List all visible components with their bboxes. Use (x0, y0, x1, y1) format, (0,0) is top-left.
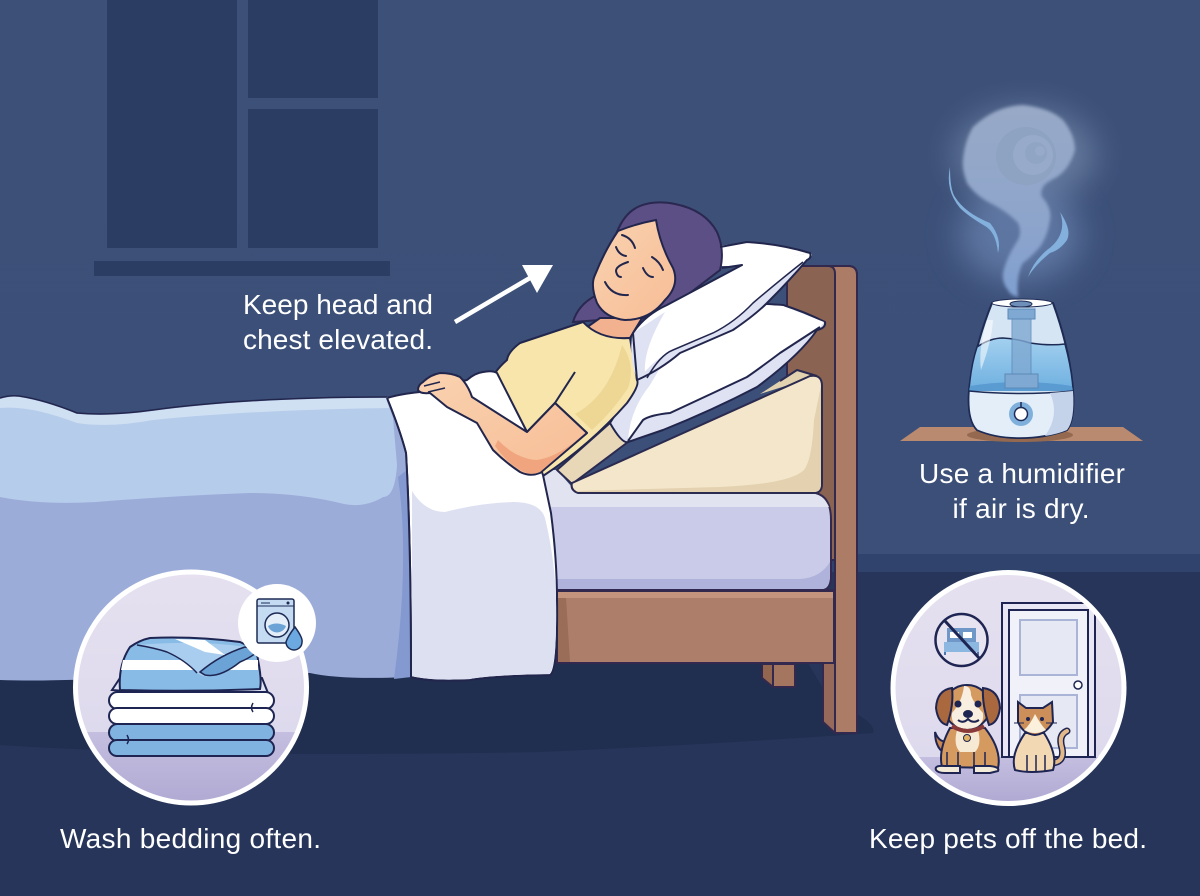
woman (387, 202, 722, 681)
facial features (605, 235, 663, 295)
door (1002, 603, 1095, 757)
water (969, 338, 1073, 390)
power dial (1009, 402, 1033, 426)
wedge pillow (557, 370, 822, 493)
shelf (900, 427, 1143, 441)
face (593, 220, 675, 320)
base (969, 391, 1073, 438)
neck (583, 318, 642, 338)
shirt (495, 322, 638, 476)
lower pillow (610, 300, 825, 442)
text: keep head and chest elevated (243, 289, 433, 355)
text: use a humidifier: Use a humidifier (919, 458, 1125, 489)
mattress (535, 470, 831, 590)
text: use a humidifier (919, 458, 1125, 524)
hair (573, 202, 722, 322)
circle: wash bedding (70, 565, 316, 812)
circle: keep pets off (890, 565, 1130, 807)
text: keep head and chest elevated: chest elevated. (243, 324, 433, 355)
upper pillow back (718, 242, 810, 266)
no bed sign (936, 614, 988, 666)
text: wash bedding often: Wash bedding often. (60, 823, 321, 854)
white sheet over body (387, 371, 557, 681)
upper pillow (631, 242, 812, 380)
arrow (455, 265, 553, 322)
washing machine badge (238, 584, 316, 662)
bed frame (557, 266, 857, 733)
arm and hand (418, 373, 587, 475)
folded towels (109, 638, 274, 756)
cat (1014, 702, 1067, 772)
sheet shade (412, 491, 556, 680)
text: keep pets off the bed: Keep pets off the bed. (869, 823, 1147, 854)
tube (1005, 309, 1038, 388)
body (969, 300, 1073, 438)
humidifier mist (949, 105, 1097, 297)
text: keep head and chest elevated: Keep head and (243, 289, 433, 320)
gloss (980, 320, 993, 370)
dog (935, 685, 1000, 773)
text: use a humidifier: if air is dry. (952, 493, 1090, 524)
humidifier (900, 299, 1143, 442)
blanket (0, 396, 411, 680)
window (94, 0, 390, 276)
